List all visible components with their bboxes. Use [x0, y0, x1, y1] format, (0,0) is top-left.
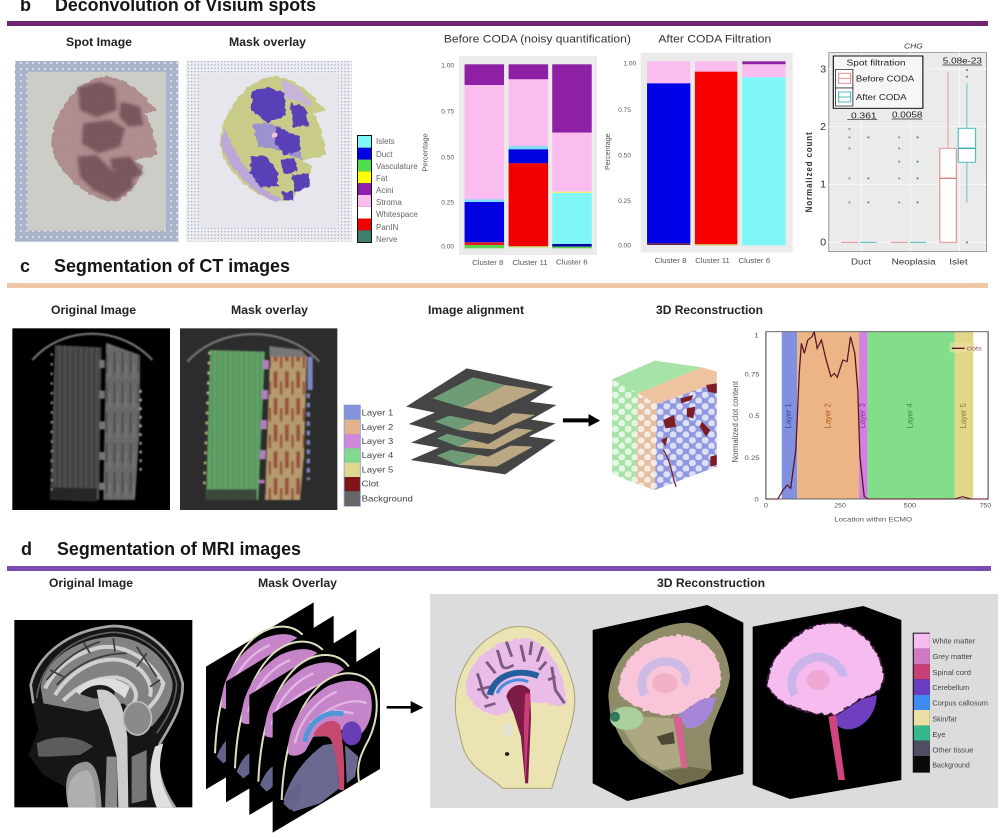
- box plot: CHG normalized count: 0.0058: [892, 110, 923, 120]
- stacked bar chart: before CODA: 0.00: [441, 244, 454, 251]
- line chart: clot content by layer: Location within ECMO: [834, 516, 912, 523]
- legend: tissue classes: Fat: [376, 174, 388, 183]
- line chart: clot content by layer: 500: [904, 502, 916, 509]
- box plot: CHG normalized count: Neoplasia: [892, 257, 937, 266]
- legend: tissue classes: Stroma: [376, 198, 402, 207]
- box plot: CHG normalized count: Islet: [949, 257, 968, 266]
- legend: tissue classes: Vasculature: [376, 162, 418, 171]
- legend: tissue classes: [357, 135, 418, 244]
- brain in black box: [753, 606, 901, 799]
- legend: brain tissues: [913, 633, 988, 773]
- label: mask overlay: Mask Overlay: [258, 576, 337, 590]
- box plot: CHG normalized count: 2: [820, 122, 826, 133]
- stacked bar chart: before CODA: Cluster 11: [512, 258, 548, 267]
- legend: CT layers: Layer 5: [362, 466, 394, 475]
- line chart: clot content by layer: 0.5: [749, 412, 759, 420]
- label: 3D reconstruction: 3D Reconstruction: [656, 303, 763, 317]
- line chart: clot content by layer: 250: [834, 502, 846, 509]
- line chart: clot content by layer: Layer 2: [823, 403, 833, 428]
- line chart: clot content by layer: Layer 1: [783, 403, 793, 428]
- legend: CT layers: Layer 2: [362, 423, 394, 433]
- mask overlay image: [186, 61, 352, 242]
- line chart: clot content by layer: 750: [980, 502, 991, 509]
- box plot: CHG normalized count: [803, 42, 986, 266]
- CT original image: [12, 328, 170, 510]
- chart title: after CODA: After CODA Filtration: [658, 33, 771, 45]
- line chart: clot content by layer: Layer 5: [958, 403, 968, 428]
- slice 3: [249, 629, 356, 815]
- legend: brain tissues: Cerebellum: [932, 683, 969, 692]
- legend: brain tissues: Skin/fat: [932, 715, 957, 723]
- cut-away head render: [455, 626, 575, 788]
- box plot: CHG normalized count: 0: [820, 238, 826, 248]
- box plot legend: [833, 56, 923, 108]
- image alignment: stacked slices: [406, 368, 557, 474]
- legend: CT layers: Clot: [362, 480, 379, 489]
- slice 1: [206, 602, 314, 789]
- spot image: [15, 61, 178, 242]
- label: 3D reconstruction: 3D Reconstruction: [657, 576, 765, 590]
- line chart: clot content by layer: Layer 3: [857, 403, 867, 428]
- box plot: CHG normalized count: Duct: [851, 257, 871, 266]
- stacked bar chart: after CODA: [605, 53, 793, 265]
- stacked bar chart: before CODA: 0.25: [441, 200, 454, 207]
- legend: tissue classes: Whitespace: [376, 210, 418, 219]
- stacked bar chart: before CODA: Cluster 6: [556, 258, 588, 266]
- stacked bar chart: before CODA: [422, 56, 597, 267]
- line chart: clot content by layer: 1: [754, 331, 759, 339]
- box plot legend: Before CODA: [856, 74, 914, 83]
- legend: tissue classes: Islets: [376, 137, 395, 146]
- heading d: d: [21, 539, 32, 559]
- legend: brain tissues: White matter: [932, 637, 976, 645]
- legend: brain tissues: Background: [932, 761, 970, 770]
- legend: brain tissues: Corpus callosum: [932, 699, 988, 708]
- box plot: CHG normalized count: CHG: [904, 42, 923, 51]
- stacked bar chart: after CODA: 0.00: [618, 243, 631, 250]
- slice 2: [226, 616, 334, 802]
- panel c: segmentation of CT images: [7, 256, 991, 523]
- MRI mask overlay stack: [206, 602, 380, 833]
- legend: tissue classes: Duct: [376, 150, 393, 159]
- stacked bar chart: before CODA: 0.75: [441, 109, 454, 116]
- CT mask overlay image: [180, 328, 337, 510]
- stacked bar chart: after CODA: 0.50: [618, 153, 631, 160]
- legend: CT layers: Layer 4: [362, 451, 394, 461]
- arrow: alignment to 3D: [563, 414, 600, 427]
- label: image alignment: Image alignment: [428, 303, 524, 317]
- legend: tissue classes: PanIN: [376, 223, 398, 232]
- label: spot image: Spot Image: [66, 35, 132, 49]
- legend: CT layers: Layer 3: [362, 437, 394, 447]
- slice 4: [273, 647, 380, 833]
- stacked bar chart: before CODA: Cluster 8: [472, 258, 503, 267]
- 3D reconstruction panel: [430, 594, 998, 808]
- box plot legend: After CODA: [856, 92, 907, 102]
- panel d: segmentation of MRI images: [7, 539, 998, 833]
- label: original image: Original Image: [51, 303, 136, 317]
- panel b: deconvolution of Visium spots: [7, 0, 988, 267]
- stacked bar chart: after CODA: 1.00: [623, 61, 636, 68]
- line chart: clot content by layer: clots: [967, 345, 982, 352]
- box plot: CHG normalized count: 1: [820, 180, 826, 190]
- translucent head in black box: [593, 605, 743, 801]
- stacked bar chart: after CODA: Cluster 11: [695, 256, 730, 265]
- label: original image: Original Image: [49, 576, 133, 590]
- legend: brain tissues: Other tissue: [932, 746, 974, 754]
- box plot: CHG normalized count: 5.08e-23: [943, 56, 982, 66]
- line chart: clot content by layer: Layer 4: [905, 403, 915, 428]
- line chart: clot content by layer: 0: [764, 502, 768, 509]
- label: mask overlay: Mask overlay: [231, 303, 308, 317]
- line chart: clot content by layer: 0.25: [745, 454, 759, 462]
- stacked bar chart: after CODA: Percentage: [605, 133, 612, 170]
- line chart: clot content by layer: 0: [754, 496, 759, 503]
- stacked bar chart: before CODA: Percentage: [422, 133, 429, 172]
- legend: tissue classes: Acini: [376, 186, 394, 195]
- stacked bar chart: after CODA: Cluster 6: [738, 256, 770, 265]
- line chart: clot content by layer: 0.75: [745, 370, 759, 378]
- legend: tissue classes: Nerve: [376, 235, 398, 244]
- 3D reconstruction cube: [612, 361, 717, 490]
- legend: brain tissues: Spinal cord: [932, 668, 971, 677]
- heading c: Segmentation of CT images: [54, 256, 290, 276]
- box plot: CHG normalized count: 3: [820, 65, 826, 75]
- stacked bar chart: after CODA: 0.25: [618, 198, 631, 205]
- box plot: CHG normalized count: 0.361: [851, 111, 877, 121]
- line chart: clot content by layer: [730, 331, 991, 523]
- stacked bar chart: before CODA: 0.50: [441, 155, 454, 161]
- chart title: before CODA: Before CODA (noisy quantification): [444, 33, 631, 45]
- legend: brain tissues: Eye: [932, 730, 946, 739]
- legend: CT layers: [344, 405, 413, 507]
- legend: CT layers: Background: [362, 494, 413, 504]
- stacked bar chart: before CODA: 1.00: [441, 63, 454, 69]
- MRI original sagittal image: [14, 620, 192, 807]
- legend: CT layers: Layer 1: [362, 409, 394, 418]
- box plot legend: Spot filtration: [846, 58, 906, 68]
- stacked bar chart: after CODA: Cluster 8: [655, 256, 687, 265]
- stacked bar chart: after CODA: 0.75: [618, 107, 631, 114]
- heading c: c: [20, 256, 30, 276]
- heading d: Segmentation of MRI images: [57, 539, 301, 559]
- arrow: mask to 3D: [387, 701, 423, 714]
- line chart: clot content by layer: Normalized clot content: [730, 380, 740, 463]
- legend: brain tissues: Grey matter: [932, 652, 973, 661]
- box plot: CHG normalized count: Normalized count: [803, 132, 814, 212]
- label: mask overlay: Mask overlay: [229, 35, 306, 49]
